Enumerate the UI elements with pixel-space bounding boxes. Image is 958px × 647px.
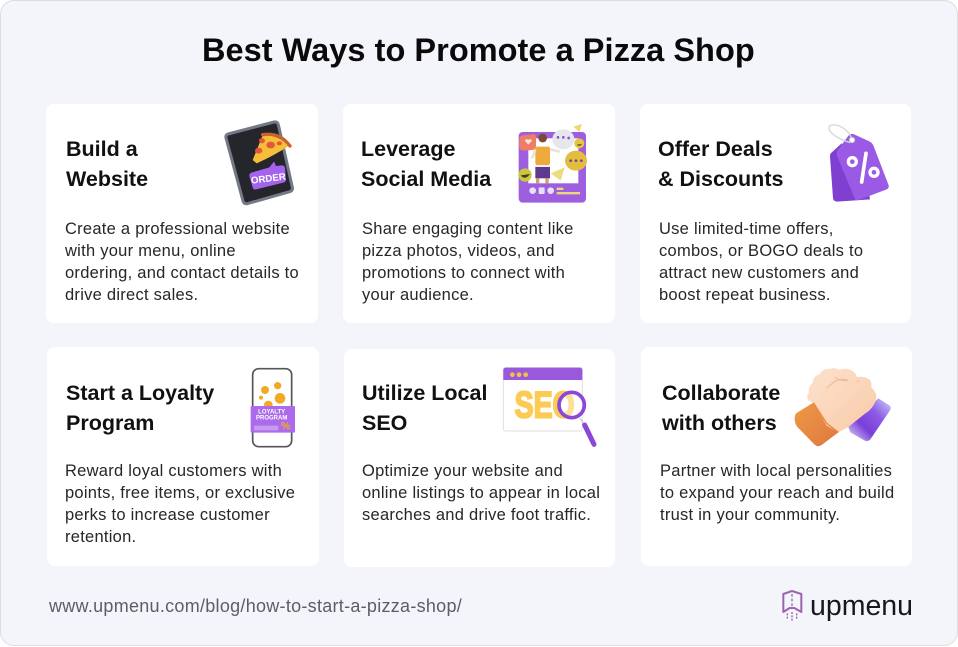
icon: upmenu book mark (782, 590, 802, 621)
icon: phone with loyalty coupon (250, 368, 295, 448)
panel: offer deals and discounts (640, 104, 911, 323)
body text: build a website: ordering, and contact details to (65, 264, 299, 282)
body text: utilize local seo: searches and drive foot traffic. (362, 506, 591, 524)
body text: offer deals and discounts: combos, or BOGO deals to (659, 242, 863, 260)
heading: start a loyalty program: Start a Loyalty (66, 381, 214, 405)
title: Best Ways to Promote a Pizza Shop (202, 32, 755, 68)
heading: collaborate with others: Collaborate (662, 381, 780, 405)
heading: build a website: Build a (66, 137, 138, 161)
body text: leverage social media: your audience. (362, 286, 474, 304)
heading: start a loyalty program: Program (66, 411, 154, 435)
body text: leverage social media: Share engaging content like (362, 220, 574, 238)
body text: collaborate with others: trust in your community. (660, 506, 840, 524)
wordmark: upmenu (810, 590, 913, 622)
body text: collaborate with others: Partner with local personalities (660, 462, 892, 480)
heading: start a loyalty program (66, 381, 214, 435)
icon: seo browser with magnifier (502, 367, 596, 447)
heading: leverage social media: Leverage (361, 137, 455, 161)
body text: build a website: Create a professional website (65, 220, 290, 238)
body text: build a website: with your menu, online (65, 242, 236, 260)
source url: www.upmenu.com/blog/how-to-start-a-pizza-shop/ (49, 596, 462, 616)
icon: phone with loyalty coupon: LOYALTY (258, 410, 285, 416)
heading: utilize local seo: SEO (362, 411, 407, 435)
body text: start a loyalty program: Reward loyal customers with (65, 462, 282, 480)
heading: build a website (66, 137, 148, 191)
body text: start a loyalty program: points, free items, or exclusive (65, 484, 295, 502)
body text: utilize local seo: Optimize your website and (362, 462, 563, 480)
body text: utilize local seo (362, 462, 600, 524)
body text: collaborate with others: to expand your reach and build (660, 484, 894, 502)
icon: seo browser with magnifier: SEO (515, 384, 575, 426)
heading: offer deals and discounts: Offer Deals (658, 137, 773, 161)
heading: build a website: Website (66, 167, 148, 191)
body text: leverage social media: promotions to connect with (362, 264, 565, 282)
icon: social media frame (518, 124, 587, 203)
body text: build a website (65, 220, 299, 304)
heading: leverage social media (361, 137, 492, 191)
body text: offer deals and discounts: boost repeat business. (659, 286, 831, 304)
body text: start a loyalty program (65, 462, 295, 546)
body text: utilize local seo: online listings to appear in local (362, 484, 600, 502)
logo: upmenu (782, 590, 913, 622)
body text: collaborate with others (660, 462, 894, 524)
body text: start a loyalty program: perks to increase customer (65, 506, 270, 524)
panel: start a loyalty program (47, 347, 319, 566)
icon: discount price tags (828, 124, 889, 202)
body text: offer deals and discounts: Use limited-time offers, (659, 220, 834, 238)
heading: collaborate with others (662, 381, 780, 435)
heading: collaborate with others: with others (662, 411, 777, 435)
body text: offer deals and discounts: attract new customers and (659, 264, 859, 282)
panel: build a website (46, 104, 318, 323)
icon: phone with loyalty coupon: PROGRAM (256, 416, 287, 422)
body text: start a loyalty program: retention. (65, 528, 136, 546)
icon: phone with pizza order (224, 120, 294, 206)
heading: utilize local seo: Utilize Local (362, 381, 487, 405)
icon: phone with pizza order: ORDER (250, 172, 286, 187)
icon: clasped hands (794, 368, 891, 446)
body text: build a website: drive direct sales. (65, 286, 198, 304)
body text: offer deals and discounts (659, 220, 863, 304)
body text: leverage social media: pizza photos, videos, and (362, 242, 555, 260)
heading: leverage social media: Social Media (361, 167, 491, 191)
body text: leverage social media (362, 220, 574, 304)
heading: offer deals and discounts: & Discounts (658, 167, 783, 191)
panel: utilize local seo (344, 349, 615, 567)
icon: phone with loyalty coupon: % (281, 421, 291, 433)
panel: leverage social media (343, 104, 615, 323)
heading: utilize local seo (362, 381, 487, 435)
panel: collaborate with others (641, 347, 912, 566)
heading: offer deals and discounts (658, 137, 783, 191)
